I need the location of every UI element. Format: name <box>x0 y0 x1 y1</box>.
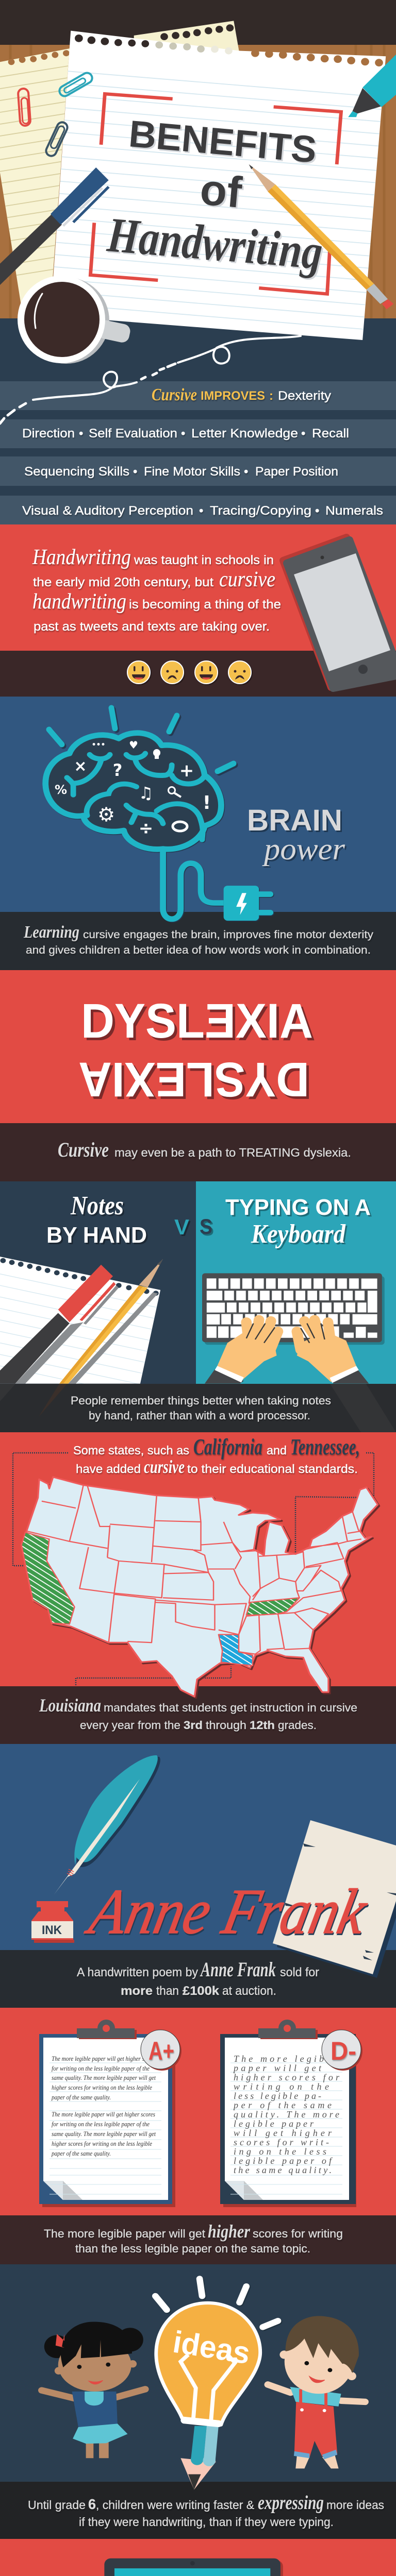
louisiana caption: 3rd <box>184 1719 203 1732</box>
states text: to their educational standards. <box>187 1462 358 1476</box>
states text: California <box>193 1434 262 1460</box>
anne frank caption: than <box>156 1984 179 1998</box>
title <box>105 113 325 280</box>
history text <box>32 546 281 634</box>
louisiana caption: every year from the <box>80 1719 180 1732</box>
heading: vs <box>174 1214 212 1239</box>
brain icons: ♥ <box>129 739 138 751</box>
brain caption: Learning <box>23 923 79 942</box>
ideas caption: Until grade <box>28 2498 86 2512</box>
list of improved skills: Letter Knowledge <box>191 427 298 440</box>
icon: brain rays <box>49 708 234 771</box>
legible writing sample <box>51 2055 156 2157</box>
legible writing sample: same quality. The more legible paper will get <box>52 2074 156 2081</box>
clipboard: d minus <box>220 2020 362 2207</box>
note-taking caption: People remember things better when taking notes <box>71 1394 331 1407</box>
dotted leader lines <box>13 1453 374 1685</box>
brain icons: % <box>55 783 67 797</box>
thread <box>160 336 301 370</box>
ideas label: ideas <box>171 2325 253 2370</box>
legible writing sample: The more legible paper will get higher scores <box>52 2110 155 2118</box>
brain icons <box>55 739 211 839</box>
ideas caption <box>28 2492 384 2529</box>
states text: Some states, such as <box>73 1444 189 1457</box>
section: us map states <box>0 1432 396 1744</box>
section: steve jobs <box>0 2539 396 2576</box>
illegible writing sample: higher scores for <box>234 2072 340 2082</box>
list of improved skills: Recall <box>312 427 349 440</box>
illegible writing sample: the same quality. <box>234 2165 332 2175</box>
anne frank signature: Anne Frank <box>81 1876 373 1947</box>
illegible writing sample <box>233 2054 340 2175</box>
illegible writing sample: legible paper of <box>234 2156 333 2166</box>
legible writing sample: for writing on the less legible paper of the <box>52 2120 150 2128</box>
louisiana caption: through <box>206 1719 246 1732</box>
ideas caption: 6 <box>88 2496 96 2512</box>
anne frank caption: sold for <box>280 1965 319 1979</box>
brain icons: ÷ <box>139 818 153 839</box>
anne frank caption <box>77 1958 319 1998</box>
list of improved skills <box>22 385 383 518</box>
states text: Tennessee, <box>290 1434 360 1460</box>
list of improved skills: Direction <box>22 427 75 440</box>
icon: emoji row <box>127 661 251 684</box>
legibility caption: The more legible paper will get <box>44 2227 205 2240</box>
illegible writing sample: per of the same <box>233 2100 332 2110</box>
thread continued <box>0 372 157 423</box>
states text: cursive <box>144 1456 185 1477</box>
list of improved skills: • <box>301 427 305 440</box>
note-taking caption <box>0 1384 396 1432</box>
clipboard: a plus <box>39 2020 182 2207</box>
illegible writing sample: paper will get <box>233 2063 322 2073</box>
illegible writing sample: The more legib <box>234 2054 324 2064</box>
section: legibility clipboards <box>0 2008 396 2264</box>
icon: blue pen <box>0 167 109 285</box>
icon: boy <box>268 2316 365 2468</box>
history text: past as tweets and texts are taking over. <box>34 620 270 634</box>
section: anne frank <box>0 1744 396 2008</box>
clipboard: a plus: A+ <box>148 2037 174 2065</box>
legible writing sample: higher scores for writing on the less legible <box>52 2140 152 2147</box>
list of improved skills: Self Evaluation <box>89 427 177 440</box>
legibility caption: higher <box>208 2221 251 2242</box>
list of improved skills: Sequencing Skills <box>24 465 129 479</box>
legible writing sample: for writing on the less legible paper of the <box>52 2064 150 2072</box>
list of improved skills: IMPROVES <box>201 389 265 403</box>
icon: ink bottle: INK <box>42 1923 62 1937</box>
map of united states <box>22 1477 378 1697</box>
brain icons: ♫ <box>139 783 153 803</box>
icon: brain with plug <box>45 733 270 921</box>
icon: coffee mug <box>18 276 131 364</box>
legibility caption <box>44 2221 343 2255</box>
louisiana caption: mandates that students get instruction in cursive <box>104 1701 357 1714</box>
illegible writing sample: writing on the <box>234 2081 329 2092</box>
icon: laptop <box>88 2558 299 2576</box>
louisiana caption <box>39 1695 357 1732</box>
heading: typing on a keyboard: TYPING ON A <box>225 1195 371 1220</box>
section: phone and handwriting history <box>0 524 396 697</box>
brain icons: ? <box>113 760 122 780</box>
list of improved skills: Cursive <box>152 385 197 404</box>
history text: Handwriting <box>32 546 131 569</box>
list of improved skills: Numerals <box>325 504 383 518</box>
legible writing sample: higher scores for writing on the less legible <box>52 2083 152 2091</box>
list of improved skills: Paper Position <box>255 465 338 479</box>
list of improved skills: • <box>315 504 319 518</box>
title: Handwriting <box>105 207 325 280</box>
icon: phone <box>283 537 396 688</box>
heading: notes by hand <box>46 1191 147 1248</box>
icon: ink bottle <box>31 1901 74 1943</box>
dyslexia caption: Cursive <box>58 1138 109 1161</box>
title: BENEFITS <box>127 113 318 171</box>
icon: teal highlighter <box>348 55 396 117</box>
dyslexia caption <box>58 1138 351 1161</box>
heading: notes by hand: Notes <box>70 1191 124 1221</box>
list of improved skills: • <box>244 465 248 479</box>
notebook, pen and pencil <box>0 1257 163 1384</box>
brain icons: + <box>179 760 194 781</box>
illegible writing sample: ing on the less <box>234 2146 326 2157</box>
section: dyslexia <box>0 970 396 1181</box>
history text: the early mid 20th century, but <box>33 575 213 589</box>
heading: typing on a keyboard <box>225 1195 371 1249</box>
heading: typing on a keyboard: Keyboard <box>251 1219 346 1249</box>
icon: yellow pencil <box>249 164 393 309</box>
illegible writing sample: scores for writ- <box>234 2137 329 2147</box>
papers on desk <box>0 21 389 340</box>
legible writing sample: The more legible paper will get higher s <box>52 2055 144 2062</box>
heading: notes by hand: BY HAND <box>46 1223 147 1248</box>
heading: vs: V <box>174 1215 189 1239</box>
anne frank caption: £100k <box>183 1984 220 1998</box>
list of improved skills: • <box>79 427 83 440</box>
section: desk header <box>0 0 396 381</box>
ideas caption: if they were handwriting, than if they were typing. <box>79 2515 334 2529</box>
brain icons: ••• <box>92 741 105 749</box>
legibility caption: scores for writing <box>253 2227 343 2240</box>
note-taking caption: by hand, rather than with a word processor. <box>89 1409 310 1422</box>
list of improved skills: • <box>199 504 203 518</box>
anne frank caption: Anne Frank <box>200 1958 276 1981</box>
ideas caption: expressing <box>258 2492 324 2514</box>
louisiana caption: Louisiana <box>39 1695 101 1716</box>
list of improved skills: : <box>269 389 273 403</box>
brain power heading: BRAIN <box>247 804 342 837</box>
icon: quill <box>54 1755 160 1894</box>
ideas caption: , children were writing faster & <box>96 2498 254 2512</box>
states text <box>73 1434 360 1477</box>
brain power heading: power <box>262 832 345 866</box>
list of improved skills: Fine Motor Skills <box>144 465 240 479</box>
louisiana caption: 12th <box>250 1719 275 1732</box>
brain icons: ⚙ <box>97 803 115 826</box>
brain caption: and gives children a better idea of how words work in combination. <box>26 944 371 956</box>
keyboard with hands <box>202 1273 385 1384</box>
ideas caption: more ideas <box>326 2498 384 2512</box>
red title brackets <box>90 94 341 294</box>
illegible writing sample: will get higher <box>234 2128 332 2138</box>
history text: handwriting <box>32 590 126 614</box>
heading: vs: S <box>200 1214 212 1239</box>
history text: was taught in schools in <box>134 553 274 567</box>
illegible writing sample: legible paper <box>234 2119 314 2129</box>
legible writing sample: same quality. The more legible paper will get <box>52 2130 156 2138</box>
dyslexia mirrored words <box>78 994 313 1107</box>
dyslexia caption: may even be a path to TREATING dyslexia. <box>114 1146 351 1159</box>
brain icons: ! <box>203 792 211 814</box>
illegible writing sample: less legible pa- <box>234 2091 321 2101</box>
section: cursive improves stripes <box>0 372 396 524</box>
section: children and ideas <box>0 2264 396 2539</box>
section: notes by hand vs typing <box>0 1181 396 1432</box>
legible writing sample: paper of the same quality. <box>51 2093 111 2101</box>
anne frank caption: A handwritten poem by <box>77 1965 198 1979</box>
history text: is becoming a thing of the <box>129 598 281 612</box>
dyslexia mirrored words: DYSLEXIA <box>78 1052 309 1107</box>
list of improved skills: • <box>133 465 137 479</box>
illegible writing sample: quality. The more <box>234 2109 339 2120</box>
list of improved skills: • <box>181 427 185 440</box>
history text: cursive <box>219 568 275 591</box>
brain power heading <box>247 804 345 866</box>
brain caption <box>23 923 374 956</box>
legibility caption: than the less legible paper on the same topic. <box>75 2242 310 2255</box>
section: brain power <box>0 697 396 970</box>
anne frank caption: more <box>121 1984 153 1998</box>
list of improved skills: Tracing/Copying <box>210 504 311 518</box>
states text: have added <box>76 1462 141 1476</box>
title: of <box>198 165 244 217</box>
states text: and <box>267 1444 287 1457</box>
clipboard: d minus: D- <box>331 2037 356 2065</box>
brain caption: cursive engages the brain, improves fine motor dexterity <box>83 929 374 941</box>
dyslexia mirrored words: DYSLƎXIA <box>81 994 313 1048</box>
list of improved skills: Dexterity <box>278 389 331 403</box>
legible writing sample: paper of the same quality. <box>51 2149 111 2157</box>
icon: torn paper <box>273 1820 396 1978</box>
louisiana caption: grades. <box>278 1719 317 1732</box>
icon: paperclips <box>18 71 94 158</box>
icon: light bulb pencil <box>155 2279 278 2489</box>
list of improved skills: Visual & Auditory Perception <box>22 504 193 518</box>
icon: girl <box>42 2322 145 2458</box>
anne frank caption: at auction. <box>222 1984 276 1998</box>
brain icons: × <box>74 757 87 775</box>
